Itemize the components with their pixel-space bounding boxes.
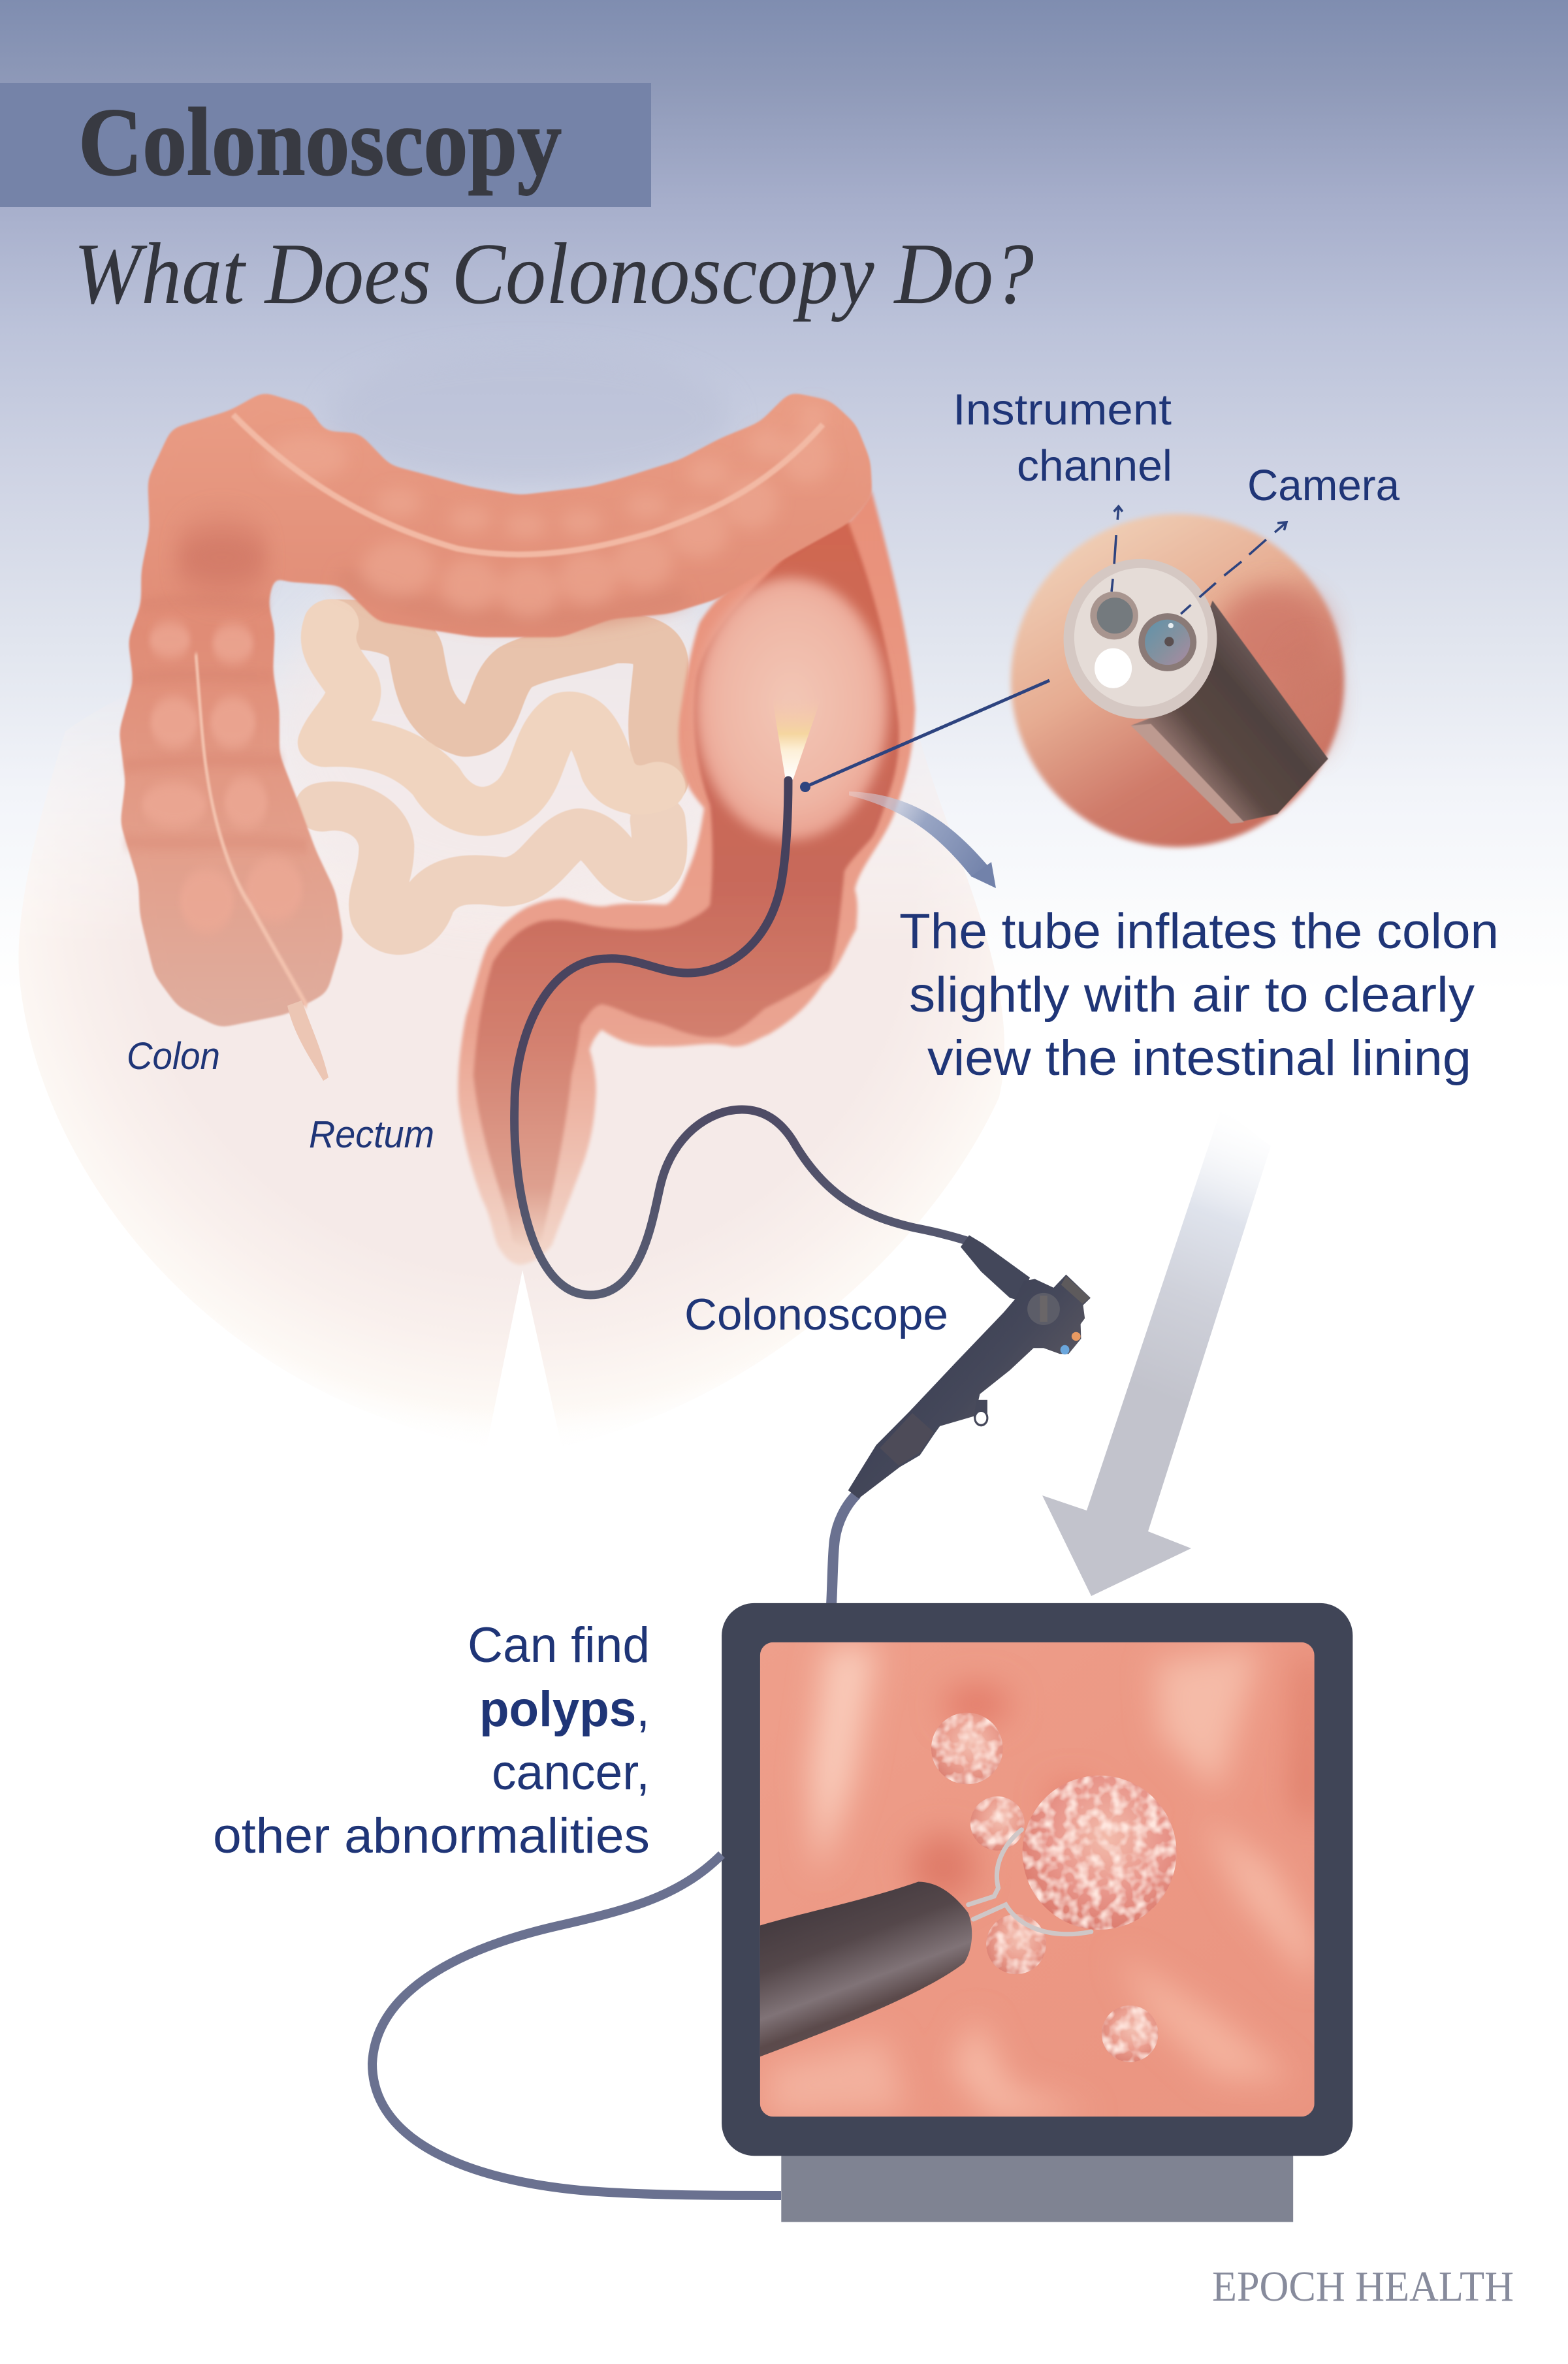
inset circle: scope tip close-up xyxy=(1011,506,1344,847)
faded body silhouette xyxy=(18,793,1004,1414)
callout: tube inflates the colon: The tube inflates the colon xyxy=(899,904,1499,959)
colonoscope handle xyxy=(848,1236,1091,1499)
sigmoid colon and light xyxy=(458,490,915,1265)
light cone xyxy=(772,697,822,780)
colonoscope tube xyxy=(515,780,973,1295)
label: Instrument channel: Instrument xyxy=(953,385,1172,434)
handle body xyxy=(848,1275,1091,1499)
callout: tube inflates the colon: view the intestinal lining xyxy=(927,1030,1471,1086)
instrument channel leader xyxy=(1112,506,1123,592)
cable from monitor xyxy=(372,1855,781,2196)
polyp mid xyxy=(970,1797,1025,1851)
big arrow to monitor xyxy=(1042,1108,1271,1596)
label: Colonoscope: Colonoscope xyxy=(684,1290,948,1339)
ascending and transverse colon xyxy=(120,392,872,1081)
leader line to inset xyxy=(800,680,1049,792)
polyp bottom right xyxy=(1102,2005,1159,2062)
monitor xyxy=(722,1603,1352,2222)
appendix xyxy=(287,1000,328,1081)
snare forceps xyxy=(968,1830,1091,1934)
monitor frame xyxy=(722,1603,1352,2156)
logo: EPOCH HEALTH xyxy=(1212,2263,1514,2310)
strain relief xyxy=(961,1236,1030,1301)
small intestine xyxy=(323,624,662,931)
curved arrow xyxy=(849,791,996,888)
callout: tube inflates the colon xyxy=(899,904,1499,1086)
callout: can find polyps: other abnormalities xyxy=(213,1808,650,1864)
polyp top xyxy=(931,1713,1003,1784)
callout: can find polyps xyxy=(213,1618,650,1864)
callout: can find polyps: Can find xyxy=(468,1618,650,1673)
callout: can find polyps: polyps, xyxy=(479,1682,650,1737)
label: Instrument channel xyxy=(953,385,1172,490)
scope tip xyxy=(760,1882,972,2056)
label: Rectum: Rectum xyxy=(309,1113,434,1156)
polyp under forceps xyxy=(986,1914,1046,1974)
colon silhouette xyxy=(120,392,872,1027)
inflated section xyxy=(695,577,888,840)
control dial xyxy=(1027,1293,1060,1325)
large polyp xyxy=(1023,1776,1177,1930)
title text: Colonoscopy xyxy=(78,89,562,196)
endoscopic view xyxy=(760,1642,1318,2117)
label: Colon: Colon xyxy=(127,1035,220,1078)
transverse haustra xyxy=(266,404,831,620)
inset scope head xyxy=(1064,559,1217,719)
label: Instrument channel: channel xyxy=(1017,441,1172,490)
monitor stand xyxy=(781,2150,1293,2222)
faint torso shadow xyxy=(327,349,731,487)
control buttons xyxy=(1061,1345,1069,1354)
light source xyxy=(1095,648,1132,688)
cecum band xyxy=(196,654,307,1006)
ascending haustra xyxy=(124,525,307,1006)
camera lens xyxy=(1138,613,1196,671)
inset scope shaft xyxy=(1131,601,1328,824)
title banner xyxy=(0,83,651,207)
cable from handle to monitor xyxy=(831,1494,857,1605)
mucosa folds xyxy=(769,1646,1318,2117)
inset tissue xyxy=(1011,514,1344,847)
transverse band xyxy=(233,415,823,554)
central warm tint xyxy=(274,555,744,908)
callout: can find polyps: cancer, xyxy=(492,1745,650,1800)
label: Camera: Camera xyxy=(1247,461,1400,510)
instrument channel opening xyxy=(1090,592,1138,639)
callout: tube inflates the colon: slightly with air to clearly xyxy=(909,967,1475,1023)
camera leader xyxy=(1181,522,1287,614)
subtitle: What Does Colonoscopy Do? xyxy=(74,225,1034,322)
sigmoid colon lumen xyxy=(473,513,899,1247)
sigmoid colon outer wall xyxy=(458,490,915,1265)
